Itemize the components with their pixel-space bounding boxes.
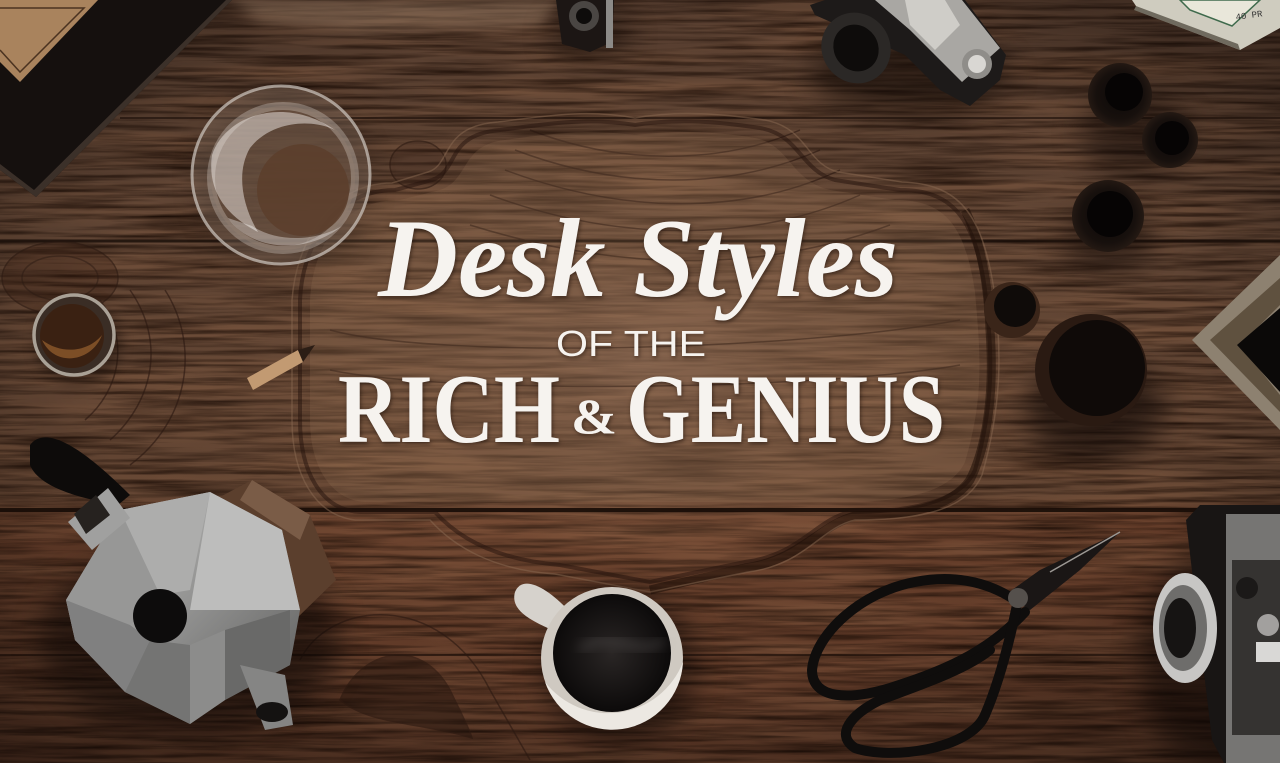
coffee mug (514, 584, 698, 746)
box top right: 40 PR (1235, 9, 1264, 23)
title line: Rich & Genius: GENIUS (626, 355, 945, 464)
title (338, 197, 945, 464)
photo negatives right (1192, 255, 1280, 430)
film canister top (550, 0, 630, 59)
pencil stub (247, 345, 315, 390)
moka pot (30, 437, 340, 735)
film rolls (984, 63, 1198, 460)
title line: Desk Styles: Desk Styles (377, 197, 898, 321)
title line: Rich & Genius: & (571, 388, 617, 444)
camera top (808, 0, 1010, 113)
scissors (812, 532, 1120, 753)
title line: of the: OF THE (556, 323, 706, 364)
title line: Rich & Genius: RICH (338, 355, 560, 464)
book top left (0, 0, 232, 197)
drinking glass (192, 86, 370, 266)
box top right (1132, 0, 1280, 50)
plaque outline (292, 114, 999, 592)
camera bottom right (1140, 505, 1280, 763)
small cup (34, 295, 122, 386)
title line: Rich & Genius (338, 355, 945, 464)
